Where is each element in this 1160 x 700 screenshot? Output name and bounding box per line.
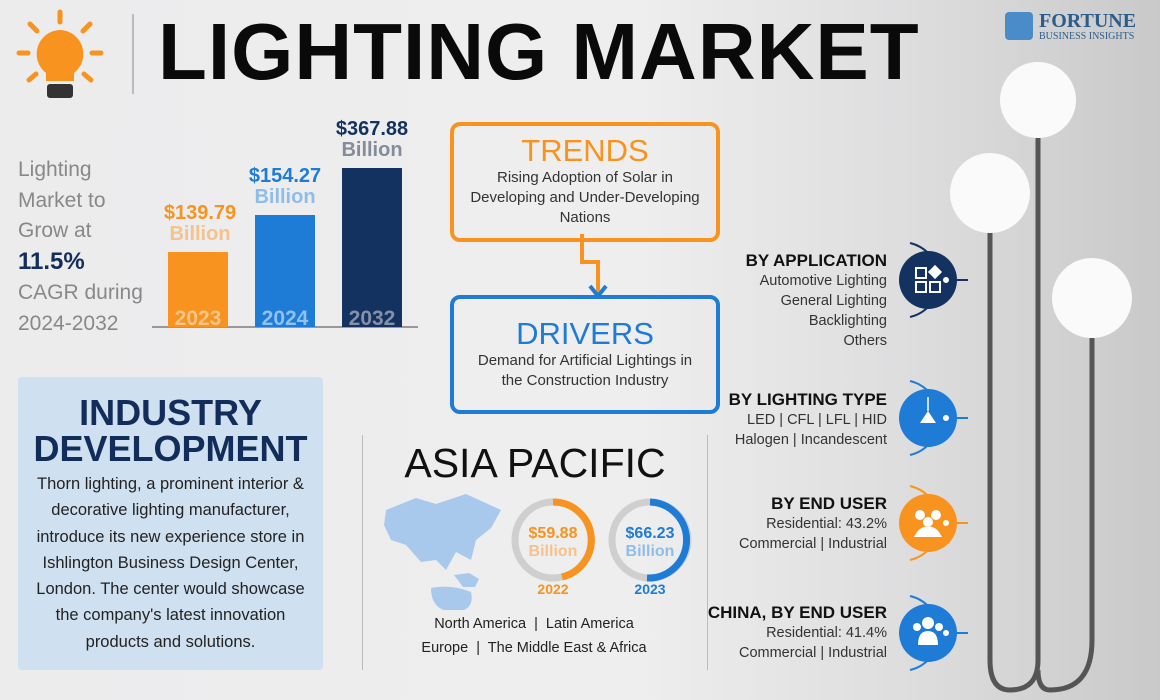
industry development panel: INDUSTRY	[79, 392, 262, 433]
segment icons	[899, 242, 968, 671]
industry development panel	[18, 377, 323, 670]
growth text	[18, 158, 143, 334]
segment: application: BY APPLICATION	[746, 251, 887, 270]
donut 2022: $59.88	[529, 525, 578, 542]
donut 2023	[608, 498, 692, 582]
donut 2023: Billion	[626, 543, 674, 560]
segment: application: Backlighting	[809, 313, 887, 329]
icon: light bulb	[16, 10, 104, 98]
text: 2023	[634, 581, 666, 597]
trends box: Rising Adoption of Solar in Developing and Under-Developing Nations	[470, 169, 700, 226]
segment: china: CHINA, BY END USER	[708, 603, 887, 622]
industry development panel: Thorn lighting, a prominent interior & decorative lighting manufacturer, introduce its new experience store in Ishlington Business Design Center, London. The center would showcase the company's latest innovation products and solutions.	[36, 475, 305, 651]
drivers box	[450, 295, 720, 414]
logo	[1005, 10, 1136, 42]
segment: china: Commercial | Industrial	[739, 645, 887, 661]
segment: end user: BY END USER	[771, 494, 887, 513]
logo: BUSINESS INSIGHTS	[1039, 31, 1134, 42]
donut 2022: Billion	[529, 543, 577, 560]
bar chart: $139.79	[164, 202, 236, 224]
segment: application: General Lighting	[781, 293, 887, 309]
trends box: TRENDS	[521, 133, 649, 168]
bar chart: Billion	[254, 186, 316, 208]
segment: application	[746, 251, 887, 349]
segment: china: Residential: 41.4%	[766, 625, 887, 641]
bar chart: Billion	[341, 139, 403, 161]
text: 2022	[537, 581, 569, 597]
bar chart: 2032	[349, 307, 395, 330]
growth text: 2024-2032	[18, 312, 118, 334]
lamp illustration	[950, 62, 1132, 692]
growth text: CAGR during	[18, 281, 143, 304]
trends box	[450, 122, 720, 242]
segment: end user: Residential: 43.2%	[766, 516, 887, 532]
segment: lighting type: BY LIGHTING TYPE	[729, 390, 887, 409]
map	[384, 494, 501, 610]
segment: lighting type: LED | CFL | LFL | HID	[747, 412, 887, 428]
asia pacific heading: ASIA PACIFIC	[404, 440, 666, 486]
industry development panel: DEVELOPMENT	[33, 428, 308, 469]
segment: china	[708, 603, 887, 661]
growth text: Market to	[18, 188, 106, 212]
other regions: Europe | The Middle East & Africa	[421, 640, 647, 656]
bar chart: 2024	[262, 307, 308, 330]
segment: end user: Commercial | Industrial	[739, 536, 887, 552]
bar chart	[152, 118, 418, 330]
title: LIGHTING MARKET	[158, 7, 920, 96]
other regions	[421, 616, 647, 656]
other regions: North America | Latin America	[434, 616, 634, 632]
drivers box: DRIVERS	[516, 316, 654, 351]
donut 2022	[512, 498, 595, 582]
growth text: 11.5%	[18, 248, 85, 274]
arrow connector	[580, 234, 608, 295]
segment: application: Automotive Lighting	[760, 273, 887, 289]
bar chart: $154.27	[249, 165, 321, 187]
growth text: Lighting	[18, 158, 92, 181]
segment: end user	[739, 494, 887, 552]
bar chart: Billion	[169, 223, 231, 245]
segment: lighting type: Halogen | Incandescent	[735, 432, 887, 448]
growth text: Grow at	[18, 219, 92, 242]
logo: FORTUNE	[1039, 10, 1136, 32]
segment: application: Others	[843, 333, 887, 349]
donut 2023: $66.23	[626, 525, 675, 542]
segment: lighting type	[729, 390, 887, 448]
bar chart: 2023	[175, 307, 221, 330]
bar chart: $367.88	[336, 118, 408, 140]
drivers box: Demand for Artificial Lightings in the Construction Industry	[478, 352, 692, 389]
